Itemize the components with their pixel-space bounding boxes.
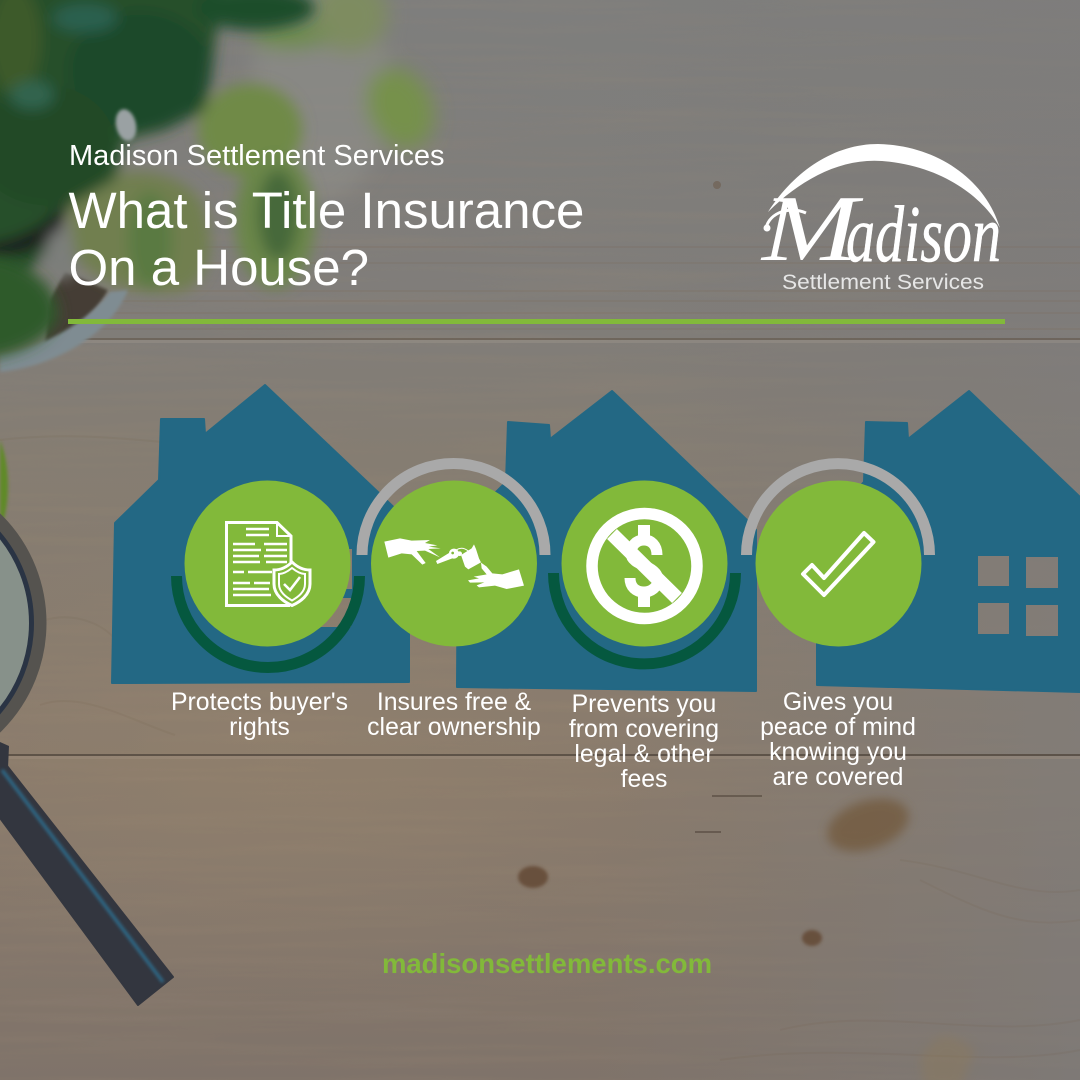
grey arc <box>746 464 930 555</box>
icon: crossed-out dollar <box>592 514 697 618</box>
wood knots <box>518 789 915 946</box>
logo: Madison Settlement Services: M <box>760 177 864 281</box>
label: peace of mind <box>760 714 916 741</box>
green circle <box>371 480 537 646</box>
step 1: protects buyer's rights <box>171 480 360 741</box>
icon: check mark <box>803 533 874 595</box>
house 2 <box>457 391 756 691</box>
logo: Madison Settlement Services: Settlement Services <box>782 271 984 294</box>
header text <box>68 140 584 296</box>
green circle <box>562 480 728 646</box>
label: Protects buyer's <box>171 689 348 716</box>
magnifying glass <box>0 477 173 1005</box>
label: rights <box>229 714 290 741</box>
label: from covering <box>569 716 719 743</box>
dark green arc <box>554 573 736 664</box>
eyebrow: company name: Madison Settlement Services <box>69 140 445 172</box>
blue paper houses <box>112 385 1080 692</box>
title: What is Title Insurance <box>68 182 584 239</box>
grey arc <box>362 464 545 555</box>
step 3: prevents legal and other fees <box>554 480 736 793</box>
website footer: madisonsettlements.com <box>382 948 712 979</box>
label: knowing you <box>769 739 907 766</box>
step 2: insures free and clear ownership <box>362 464 545 741</box>
label: legal & other <box>574 741 714 768</box>
house 1 <box>112 385 409 683</box>
label: Insures free & <box>377 689 532 716</box>
header divider <box>68 319 1005 324</box>
label: clear ownership <box>367 714 541 741</box>
label: are covered <box>773 764 903 791</box>
icon: document with shield <box>226 522 310 606</box>
logo: Madison Settlement Services <box>760 144 1001 294</box>
dark green arc <box>176 576 360 667</box>
label: Gives you <box>783 689 893 716</box>
step 4: gives peace of mind <box>746 464 930 791</box>
green circle <box>756 480 922 646</box>
logo: Madison Settlement Services: adison <box>846 191 1001 279</box>
blurred plant in pot <box>0 0 447 522</box>
title: On a House? <box>68 239 369 296</box>
icon: hands passing keys <box>384 538 524 589</box>
green circle <box>184 480 350 646</box>
house 3 with windows <box>817 391 1080 692</box>
label: Prevents you <box>572 691 716 718</box>
label: fees <box>621 766 667 793</box>
